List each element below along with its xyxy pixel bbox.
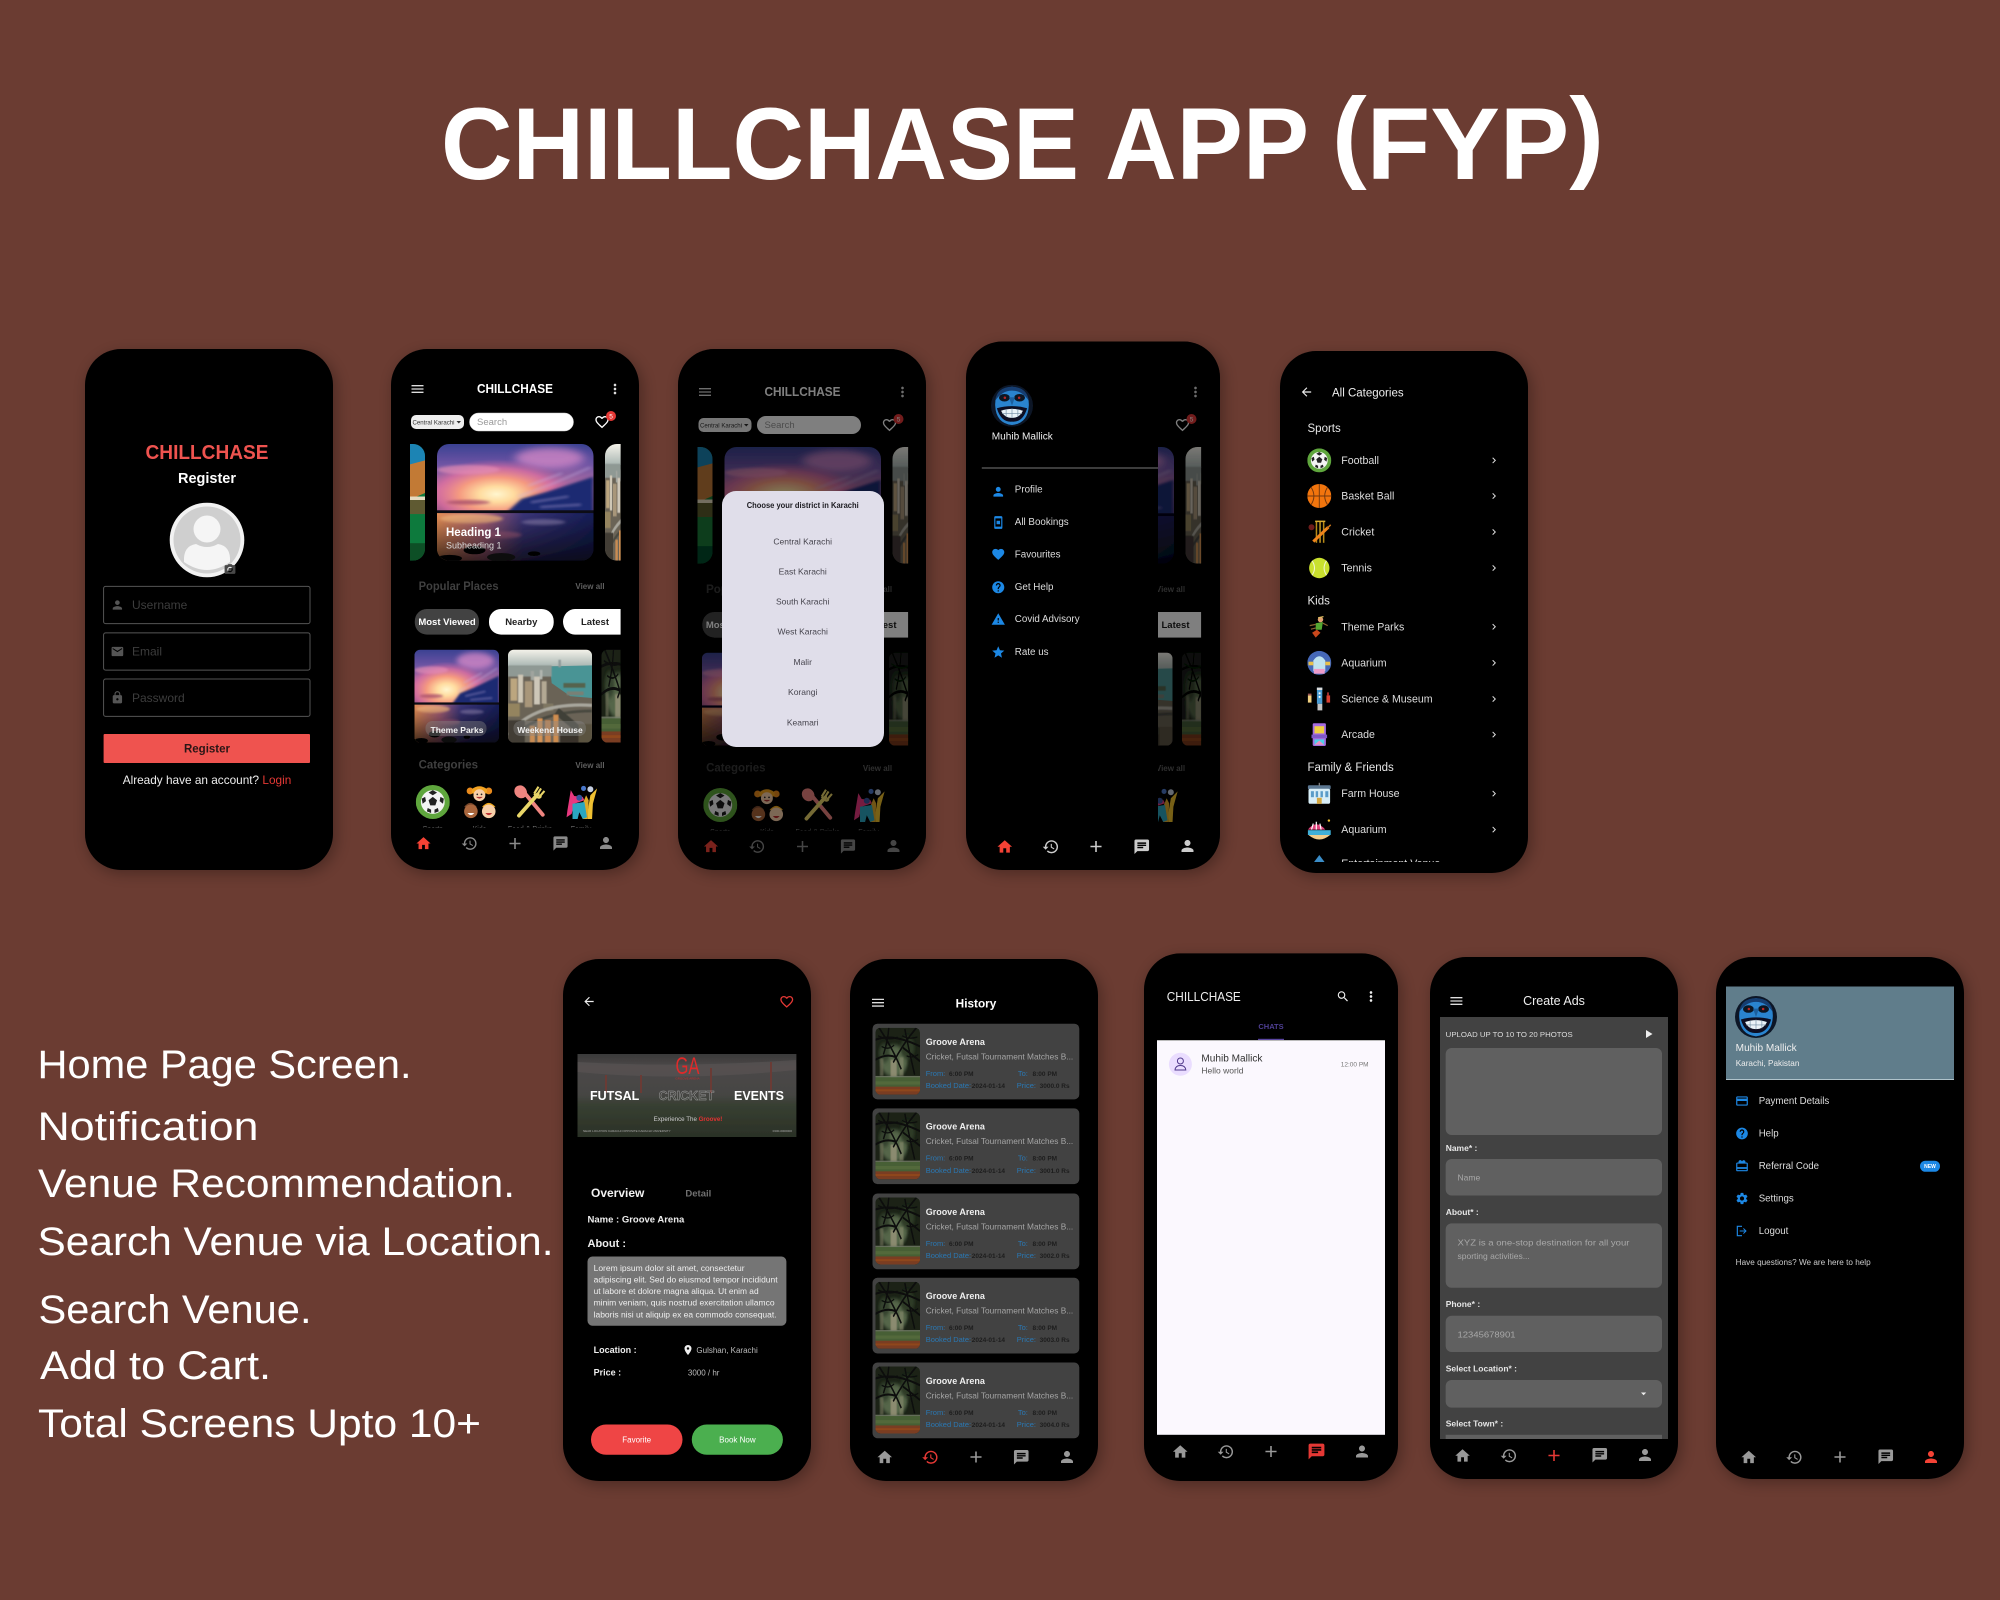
carousel and tile images, category icons xyxy=(390,444,645,819)
title: APP xyxy=(1105,87,1309,201)
drawer avatar xyxy=(991,385,1033,427)
booking card 3: Booked Date: xyxy=(926,1251,971,1260)
dimmed content behind drawer: View all xyxy=(1156,764,1185,773)
screen title: All Categories xyxy=(1332,387,1404,399)
booking card 5: From: xyxy=(926,1408,945,1417)
district dialog: East Karachi xyxy=(779,566,827,576)
drawer user name: Muhib Mallick xyxy=(992,432,1054,443)
title: ) xyxy=(1569,77,1604,191)
new badge xyxy=(1920,1161,1940,1172)
booking card 4: Booked Date: xyxy=(926,1335,971,1344)
panel: all categories screen xyxy=(1280,351,1528,873)
section: sports: Tennis xyxy=(1341,562,1372,574)
booking card 5: Cricket, Futsal Tournament Matches B... xyxy=(926,1390,1073,1400)
email field: Email xyxy=(132,645,162,659)
icon: back arrow xyxy=(584,997,594,1006)
booking card 2: 8:00 PM xyxy=(1032,1156,1057,1163)
search box: Search xyxy=(477,417,507,428)
about text box xyxy=(588,1256,786,1326)
dimmed home content: Categories xyxy=(706,763,766,775)
district dialog: Choose your district in Karachi xyxy=(747,500,859,510)
feature list text block: Add to Cart. xyxy=(40,1344,271,1388)
booking card 3: To: xyxy=(1018,1239,1028,1248)
panel: history screen xyxy=(850,959,1098,1481)
bottom navigation xyxy=(1455,1448,1651,1463)
login prompt: Already have an account? Login xyxy=(123,773,291,787)
panel: create ads screen xyxy=(1430,957,1678,1479)
district dialog xyxy=(722,491,884,747)
avatar placeholder xyxy=(170,503,244,577)
venue banner: CRICKET xyxy=(659,1089,715,1103)
dimmed home content: CHILLCHASE xyxy=(764,384,841,399)
booking card 1: To: xyxy=(1018,1069,1028,1078)
bottom navigation xyxy=(416,836,612,851)
dimmed content behind drawer xyxy=(1158,342,1220,870)
venue banner: NEAR LOCATION KARACHI OPPOSITE KARACHI UNIVERSITY xyxy=(583,1129,671,1133)
price row xyxy=(594,1368,720,1378)
booking card 4: 3003.0 Rs xyxy=(1040,1337,1070,1344)
bottom navigation xyxy=(1173,1444,1368,1459)
booking card 5: To: xyxy=(1018,1408,1028,1417)
booking card 5: 2024-01-14 xyxy=(972,1422,1005,1429)
icon: favourites with badge xyxy=(595,411,616,428)
chat list panel: Hello world xyxy=(1201,1066,1244,1076)
tile labels xyxy=(426,721,586,736)
booking card 3 xyxy=(872,1194,1079,1269)
category labels clipped xyxy=(423,826,592,828)
venue banner: GA xyxy=(676,1053,700,1080)
section: family and friends xyxy=(1308,762,1496,870)
title: ( xyxy=(1332,77,1367,191)
drawer menu: All Bookings xyxy=(1015,517,1069,528)
location select xyxy=(1446,1364,1662,1408)
booking card 4 xyxy=(872,1278,1079,1354)
favorite button xyxy=(591,1424,682,1455)
profile menu: Settings xyxy=(1759,1194,1794,1205)
phone field: 12345678901 xyxy=(1458,1330,1516,1340)
book now button xyxy=(692,1424,783,1455)
booking card 2: Booked Date: xyxy=(926,1166,971,1175)
location select: Select Location* : xyxy=(1446,1364,1517,1374)
about text box: adipiscing elit. Sed do eiusmod tempor incididunt xyxy=(594,1276,778,1285)
bottom navigation xyxy=(877,1450,1073,1465)
booking card 4: Price: xyxy=(1017,1335,1036,1344)
venue banner: Experience The Groove! xyxy=(654,1116,722,1123)
dimmed home content: Family xyxy=(858,829,879,836)
categories heading: View all xyxy=(575,761,605,770)
icon: favourites with badge: 5 xyxy=(609,414,613,420)
booking card 5: Groove Arena xyxy=(926,1376,986,1386)
app bar title: CHILLCHASE xyxy=(477,381,553,396)
venue banner: EVENTS xyxy=(734,1089,784,1103)
about text box: ut labore et dolore magna aliqua. Ut enim ad xyxy=(594,1287,759,1296)
chats tab: CHATS xyxy=(1258,1022,1284,1031)
help prompt: Have questions? We are here to help xyxy=(1736,1258,1871,1267)
category labels clipped: Family xyxy=(571,826,592,833)
section: kids xyxy=(1307,595,1496,746)
booking card 4: 6:00 PM xyxy=(949,1325,974,1332)
name field xyxy=(1446,1143,1662,1196)
search box xyxy=(470,413,574,431)
feature list text block: Notification xyxy=(38,1105,258,1149)
favorite button: Favorite xyxy=(622,1435,652,1444)
district dialog: West Karachi xyxy=(778,627,828,637)
dimmed home content: Most Viewed xyxy=(706,620,763,631)
chat list panel xyxy=(1157,1040,1385,1435)
category labels clipped: Food & Drinks xyxy=(508,826,553,833)
booking card 2: From: xyxy=(926,1154,945,1163)
section: kids: Science & Museum xyxy=(1341,694,1433,706)
panel: chats screen xyxy=(1144,953,1398,1481)
booking card 5: 3004.0 Rs xyxy=(1040,1422,1070,1429)
section: kids: Kids xyxy=(1308,595,1330,607)
district dialog: Malir xyxy=(793,657,812,667)
screen title: Create Ads xyxy=(1523,994,1585,1008)
username field xyxy=(104,586,310,624)
venue name: Name : Groove Arena xyxy=(588,1215,685,1226)
booking card 5 xyxy=(872,1362,1079,1438)
section: family and friends: Farm House xyxy=(1341,788,1400,800)
about field xyxy=(1446,1207,1662,1288)
section: family and friends: Family & Friends xyxy=(1308,762,1394,774)
booking card 3: 3002.0 Rs xyxy=(1040,1253,1070,1260)
booking card 1: Price: xyxy=(1017,1081,1036,1090)
icon: favourite heart xyxy=(780,996,793,1008)
phone field xyxy=(1446,1299,1662,1352)
profile name: Muhib Mallick xyxy=(1736,1043,1798,1054)
register button xyxy=(104,734,310,763)
about field: About* : xyxy=(1446,1207,1479,1217)
profile menu xyxy=(1736,1096,1829,1237)
name field: Name* : xyxy=(1446,1143,1478,1153)
feature list text block: Search Venue. xyxy=(38,1288,312,1332)
about field: sporting activities... xyxy=(1458,1251,1530,1261)
booking card 3: Groove Arena xyxy=(926,1207,986,1217)
panel: home screen xyxy=(390,349,645,870)
venue banner: 0300-0000000 xyxy=(773,1129,792,1133)
booking card 1: 6:00 PM xyxy=(949,1071,974,1078)
app name: CHILLCHASE xyxy=(146,442,268,464)
profile menu: Payment Details xyxy=(1759,1096,1829,1107)
screen title: History xyxy=(956,996,997,1010)
icon: search xyxy=(1338,991,1348,1001)
section: kids: Aquarium xyxy=(1341,657,1387,669)
feature list text block xyxy=(38,1043,554,1446)
profile menu: Referral Code xyxy=(1759,1161,1819,1172)
section: kids: Arcade xyxy=(1341,729,1375,741)
popular places heading xyxy=(419,581,605,593)
icon: menu xyxy=(412,385,424,393)
district dialog: South Karachi xyxy=(776,596,830,606)
booking card 3: Price: xyxy=(1017,1251,1036,1260)
booking card 3: 6:00 PM xyxy=(949,1241,974,1248)
booking card 2: Groove Arena xyxy=(926,1122,986,1132)
section: sports: Football xyxy=(1341,455,1379,467)
profile menu: Help xyxy=(1759,1129,1779,1140)
booking card 5: 6:00 PM xyxy=(949,1410,974,1417)
section: sports: Cricket xyxy=(1341,526,1374,538)
booking card 3: 8:00 PM xyxy=(1032,1241,1057,1248)
password field: Password xyxy=(132,691,185,705)
dimmed home content: Popular Places xyxy=(706,584,789,596)
username field: Username xyxy=(132,598,188,612)
dimmed home content: Latest xyxy=(869,620,897,631)
chats tab xyxy=(1258,1022,1284,1040)
new badge: NEW xyxy=(1924,1164,1936,1170)
dimmed content behind drawer: Latest xyxy=(1162,620,1190,631)
drawer menu: Profile xyxy=(1015,484,1043,496)
booking card 3: 2024-01-14 xyxy=(972,1253,1005,1260)
dimmed home content: View all xyxy=(863,585,892,594)
carousel caption: Heading 1 xyxy=(446,527,502,539)
booking card 5: Booked Date: xyxy=(926,1420,971,1429)
booking card 2: Cricket, Futsal Tournament Matches B... xyxy=(926,1136,1073,1146)
icon: more xyxy=(614,384,616,394)
venue banner: FUTSAL xyxy=(590,1089,640,1103)
filter chips: Most Viewed xyxy=(418,617,476,628)
about text box: laboris nisi ut aliquip ex ea commodo consequat. xyxy=(594,1310,777,1319)
panel: register screen xyxy=(85,349,333,870)
booking card 5: Price: xyxy=(1017,1420,1036,1429)
category labels clipped: Kids xyxy=(473,826,487,833)
location row: Gulshan, Karachi xyxy=(696,1346,758,1355)
title: CHILLCHASE xyxy=(441,87,1079,201)
district dialog: Central Karachi xyxy=(773,536,832,546)
carousel caption xyxy=(446,527,502,551)
booking card 2: 6:00 PM xyxy=(949,1156,974,1163)
icon: more xyxy=(1370,991,1372,1002)
about text box: Lorem ipsum dolor sit amet, consectetur xyxy=(594,1264,745,1273)
price row: Price : xyxy=(594,1368,621,1378)
bottom navigation xyxy=(1741,1449,1937,1464)
drawer menu: Favourites xyxy=(1015,550,1061,560)
booking card 4: 8:00 PM xyxy=(1032,1325,1057,1332)
chat row avatar xyxy=(1169,1053,1192,1076)
booking card 1: 3000.0 Rs xyxy=(1040,1083,1070,1090)
about text box: minim veniam, quis nostrud exercitation ullamco xyxy=(594,1299,775,1308)
booking card 1: 8:00 PM xyxy=(1032,1071,1057,1078)
feature list text block: Venue Recommendation. xyxy=(38,1162,515,1206)
dimmed home content: Search xyxy=(764,420,795,431)
location row xyxy=(594,1345,758,1355)
feature list text block: Home Page Screen. xyxy=(38,1043,412,1087)
booking card 1: Booked Date: xyxy=(926,1081,971,1090)
district dialog: Keamari xyxy=(787,717,819,727)
district dialog: Korangi xyxy=(788,687,817,697)
category labels clipped: Sports xyxy=(423,826,443,833)
profile location: Karachi, Pakistan xyxy=(1736,1059,1800,1068)
filter chips: Latest xyxy=(581,617,610,628)
booking card 4: 2024-01-14 xyxy=(972,1337,1005,1344)
chat row text: Muhib Mallick xyxy=(1201,1054,1263,1065)
phone field: Phone* : xyxy=(1446,1299,1480,1309)
price row: 3000 / hr xyxy=(688,1369,720,1378)
section: family and friends: Entertainment Venue xyxy=(1341,858,1440,870)
tabs: Detail xyxy=(685,1189,711,1200)
booking card 2: 2024-01-14 xyxy=(972,1168,1005,1175)
drawer menu: Get Help xyxy=(1015,582,1054,593)
dimmed home content: Sports xyxy=(710,829,731,836)
panel: venue detail screen xyxy=(563,959,811,1481)
town select: Select Town* : xyxy=(1446,1419,1503,1429)
booking card 2: Price: xyxy=(1017,1166,1036,1175)
booking card 3: From: xyxy=(926,1239,945,1248)
booking card 4: Groove Arena xyxy=(926,1291,986,1301)
section: kids: Theme Parks xyxy=(1341,621,1404,633)
dimmed home content: Food & Drinks xyxy=(795,829,840,836)
booking card 1 xyxy=(872,1024,1079,1099)
profile header xyxy=(1726,986,1954,1080)
app bar title: CHILLCHASE xyxy=(1167,990,1241,1004)
carousel caption: Subheading 1 xyxy=(446,541,502,551)
icon: play xyxy=(1646,1030,1652,1038)
about heading: About : xyxy=(588,1238,626,1250)
feature list text block: Search Venue via Location. xyxy=(38,1220,554,1264)
book now button: Book Now xyxy=(719,1435,756,1444)
dimmed home content xyxy=(698,386,908,854)
filter chips: Nearby xyxy=(505,617,538,628)
booking card 4: Cricket, Futsal Tournament Matches B... xyxy=(926,1306,1073,1316)
filter chips xyxy=(415,609,621,635)
upload heading: UPLOAD UP TO 10 TO 20 PHOTOS xyxy=(1446,1030,1573,1039)
panel: district picker screen xyxy=(678,349,932,870)
title: FYP xyxy=(1367,87,1569,201)
section: sports: Sports xyxy=(1308,423,1341,435)
venue banner: GROOVE ARENA xyxy=(675,1076,700,1080)
dimmed content behind drawer: View all xyxy=(1156,585,1185,594)
categories heading xyxy=(419,760,605,772)
title xyxy=(441,77,1604,201)
profile menu: Logout xyxy=(1759,1226,1789,1237)
feature list text block: Total Screens Upto 10+ xyxy=(38,1402,481,1446)
venue banner xyxy=(578,1053,796,1137)
dimmed content behind drawer: 5 xyxy=(1190,416,1194,424)
icon: menu xyxy=(872,999,884,1007)
icon: camera xyxy=(225,564,235,574)
email field xyxy=(104,633,310,670)
popular places heading: Popular Places xyxy=(419,581,499,593)
location row: Location : xyxy=(594,1345,637,1355)
booking card 1: Groove Arena xyxy=(926,1037,986,1047)
booking card 5: 8:00 PM xyxy=(1032,1410,1057,1417)
section: family and friends: Aquarium xyxy=(1341,824,1387,836)
panel: navigation drawer screen xyxy=(966,341,1226,870)
dimmed home content: View all xyxy=(863,764,892,773)
section: sports: Basket Ball xyxy=(1341,490,1394,502)
drawer menu xyxy=(992,484,1080,658)
booking card 4: To: xyxy=(1018,1323,1028,1332)
categories heading: Categories xyxy=(419,760,478,772)
register button: Register xyxy=(184,744,231,756)
password field xyxy=(104,679,310,716)
district dropdown: Central Karachi xyxy=(412,420,454,426)
dim overlay xyxy=(678,349,926,870)
district dropdown xyxy=(411,415,464,429)
icon: back arrow xyxy=(1302,387,1311,397)
drawer divider xyxy=(982,468,1158,469)
town select xyxy=(1446,1419,1662,1439)
tile labels: Weekend House xyxy=(517,725,583,735)
booking card 1: Cricket, Futsal Tournament Matches B... xyxy=(926,1052,1073,1062)
section: sports xyxy=(1307,423,1496,578)
booking card 1: 2024-01-14 xyxy=(972,1083,1005,1090)
dimmed home content: Kids xyxy=(760,829,774,836)
booking card 2: 3001.0 Rs xyxy=(1040,1168,1070,1175)
tabs: Overview xyxy=(591,1186,645,1200)
drawer menu: Rate us xyxy=(1015,647,1049,658)
register heading: Register xyxy=(178,471,236,487)
tabs xyxy=(591,1186,711,1200)
dimmed home content: Central Karachi xyxy=(700,424,742,430)
booking card 2: To: xyxy=(1018,1154,1028,1163)
bottom navigation xyxy=(997,839,1194,854)
profile avatar xyxy=(1735,996,1777,1038)
tile labels: Theme Parks xyxy=(431,725,484,735)
chat list panel: 12:00 PM xyxy=(1341,1062,1369,1069)
icon: menu xyxy=(1450,997,1462,1005)
about field: XYZ is a one-stop destination for all your xyxy=(1458,1238,1630,1248)
dimmed home content: 5 xyxy=(897,416,901,424)
drawer menu: Covid Advisory xyxy=(1015,614,1080,625)
booking card 2 xyxy=(872,1108,1079,1184)
photo upload box xyxy=(1446,1048,1662,1135)
booking card 4: From: xyxy=(926,1323,945,1332)
name field: Name xyxy=(1458,1173,1480,1183)
form panel xyxy=(1440,1017,1668,1439)
booking card 1: From: xyxy=(926,1069,945,1078)
booking card 3: Cricket, Futsal Tournament Matches B... xyxy=(926,1221,1073,1231)
panel: profile screen xyxy=(1716,957,1964,1479)
phone shadows xyxy=(87,345,1968,1485)
popular places heading: View all xyxy=(575,582,605,591)
